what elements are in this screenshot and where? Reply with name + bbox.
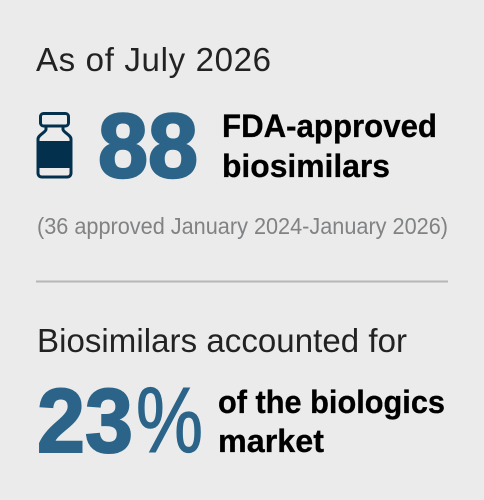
stat label: FDA-approved biosimilars: biosimilars (222, 148, 390, 184)
stat label: FDA-approved biosimilars: FDA-approved (222, 108, 437, 144)
stat: 88: 88 (98, 96, 198, 197)
stat label: of the biologics market (218, 384, 445, 459)
heading: as of date: As of July 2026 (36, 41, 271, 78)
note: approvals in period: (36 approved January 2024-January 2026) (37, 213, 448, 239)
icon: vial (38, 114, 71, 177)
text: biosimilars accounted for: Biosimilars accounted for (37, 322, 407, 359)
stat label: FDA-approved biosimilars (222, 108, 437, 184)
stat label: of the biologics market: of the biologics (218, 384, 445, 420)
stat: 23%: % (136, 368, 203, 472)
stat label: of the biologics market: market (218, 423, 324, 459)
stat: 23% (37, 368, 203, 472)
stat: 23%: 23 (37, 371, 133, 472)
